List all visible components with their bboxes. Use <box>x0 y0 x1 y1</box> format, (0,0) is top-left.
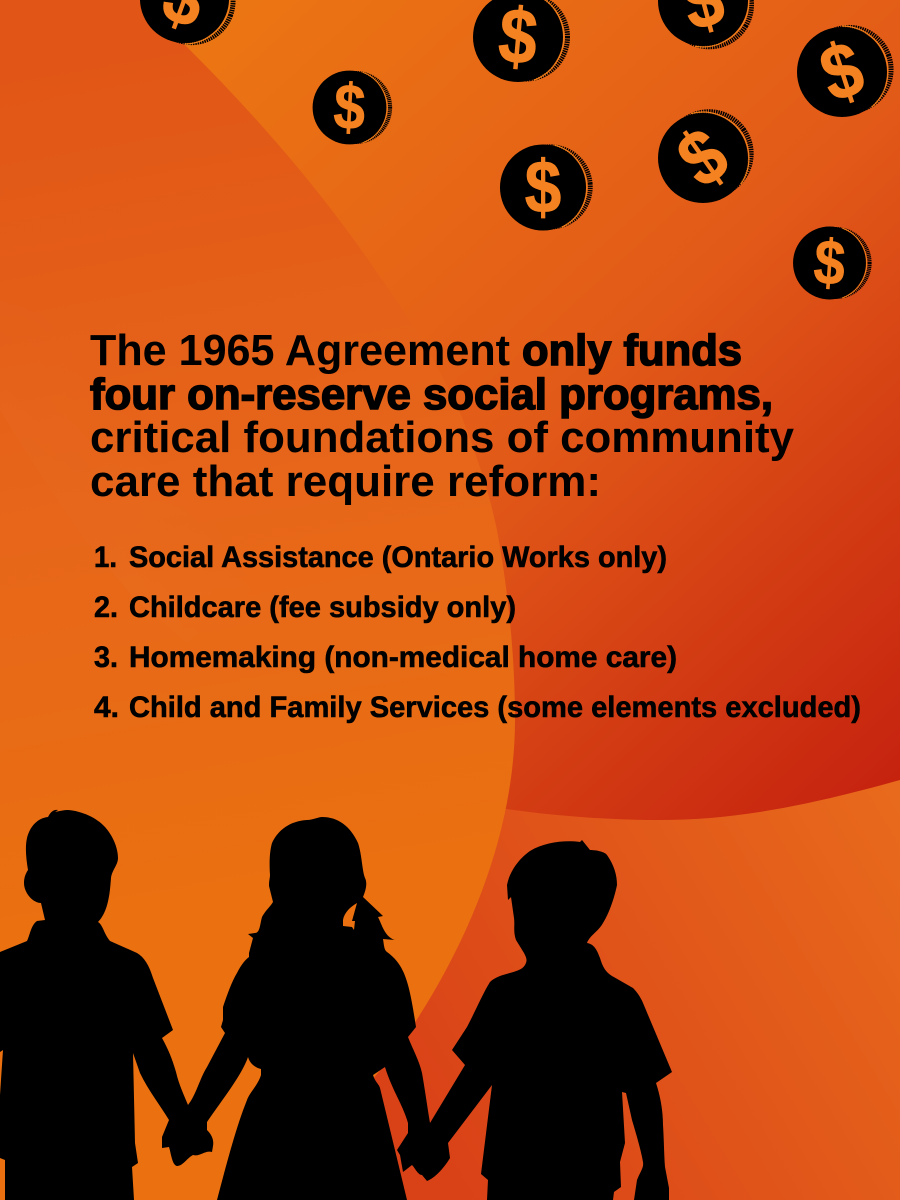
coin: top left <box>138 0 245 55</box>
coin: center: $ <box>525 144 561 228</box>
heading: critical foundations of community <box>90 413 795 462</box>
heading: only funds <box>522 326 742 375</box>
coin: far right <box>795 14 900 124</box>
coin: center <box>500 142 594 232</box>
coin: top center <box>473 0 568 82</box>
item 3: Homemaking (non-medical home care) <box>129 641 677 674</box>
numbered list <box>94 541 861 724</box>
children silhouettes <box>0 810 672 1200</box>
item 1: 1. <box>94 541 117 574</box>
item 3: 3. <box>94 641 118 674</box>
heading: The 1965 Agreement <box>90 326 510 375</box>
coin: small left <box>313 70 390 144</box>
coin: lower right: $ <box>812 226 847 299</box>
coin: far right: $ <box>810 23 873 119</box>
item 4: 4. <box>94 691 119 724</box>
silhouette: three children holding hands <box>0 810 672 1200</box>
coin: small left: $ <box>332 70 367 143</box>
coin: tilted <box>650 94 768 213</box>
coin: top right center <box>652 0 767 63</box>
heading: four on-reserve social programs, <box>90 370 773 419</box>
heading <box>90 326 795 506</box>
item 2: 2. <box>94 591 118 624</box>
item 1: Social Assistance (Ontario Works only) <box>129 541 667 574</box>
coin: tilted: $ <box>661 110 743 204</box>
item 4: Child and Family Services (some elements excluded) <box>129 691 861 724</box>
heading: care that require reform: <box>90 457 601 506</box>
coin: lower right <box>793 226 870 299</box>
item 2: Childcare (fee subsidy only) <box>129 591 516 624</box>
